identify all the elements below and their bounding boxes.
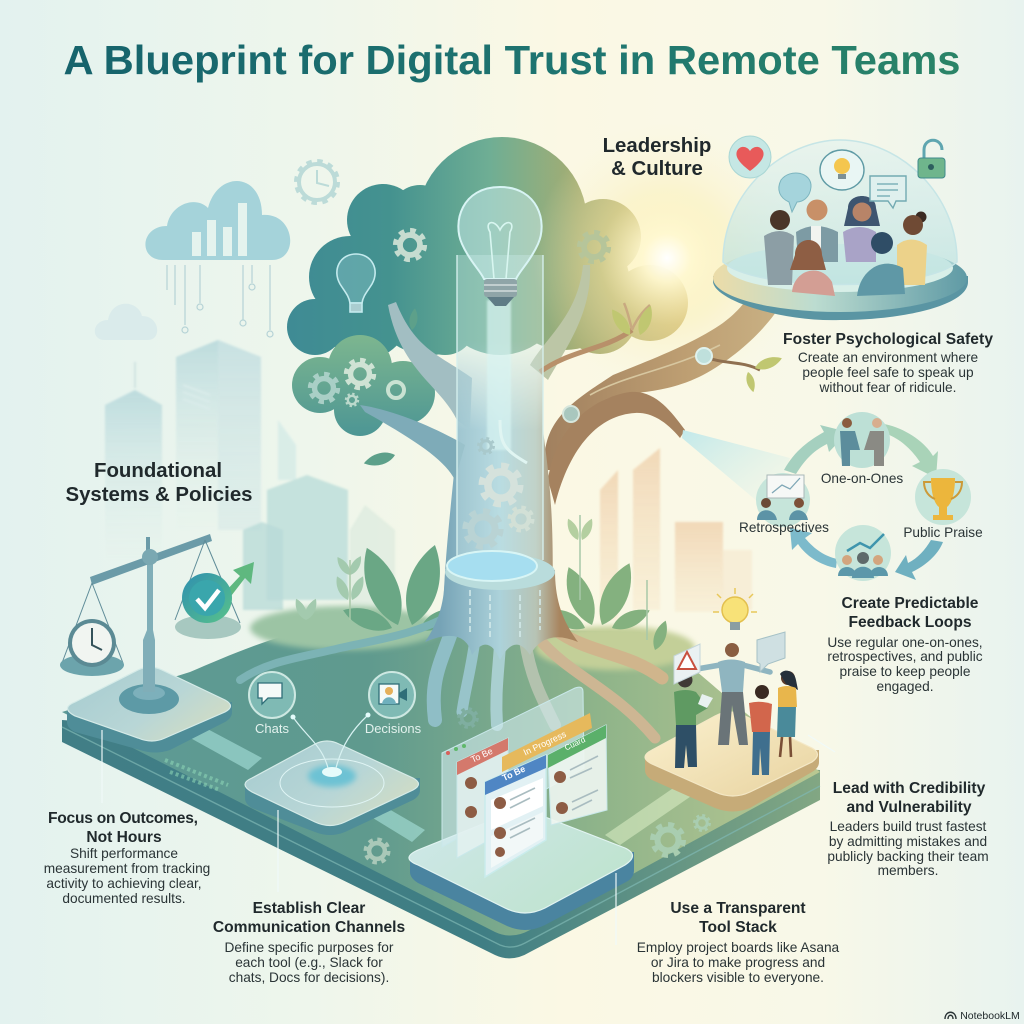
label: public praise: Public Praise xyxy=(903,525,983,540)
people in dome xyxy=(764,196,927,296)
labels: kanban columns: To Be xyxy=(501,764,527,783)
node: one-on-ones xyxy=(834,412,890,468)
heading: foundational systems: Systems & Policies xyxy=(65,484,253,506)
light beam to feedback cycle xyxy=(682,430,790,512)
label: one-on-ones: One-on-Ones xyxy=(821,471,903,486)
text: focus on outcomes: measurement from tracking xyxy=(44,861,210,876)
labels: kanban columns: In Progress xyxy=(522,729,568,758)
tree canopy xyxy=(287,137,688,359)
label: chats: Chats xyxy=(255,721,289,736)
text: transparent tool stack: blockers visible to everyone. xyxy=(652,970,824,985)
glass bridges between tiles xyxy=(165,725,700,845)
communication tile xyxy=(245,712,420,835)
text: transparent tool stack: Use a Transparent xyxy=(670,900,806,917)
text: credibility and vulnerability xyxy=(827,780,989,878)
text: predictable feedback loops: Use regular one-on-ones, xyxy=(827,635,983,650)
text: focus on outcomes xyxy=(44,810,210,906)
icon: chats xyxy=(249,672,295,736)
heading: leadership and culture xyxy=(603,135,711,180)
cycle arrows xyxy=(784,424,943,580)
text: predictable feedback loops: praise to keep people xyxy=(840,664,970,679)
heading: foundational systems: Foundational xyxy=(94,460,222,482)
text: transparent tool stack xyxy=(637,900,840,985)
trunk gears xyxy=(465,438,533,547)
text: focus on outcomes: documented results. xyxy=(62,891,186,906)
text: clear communication channels: each tool (e.g., Slack for xyxy=(235,955,383,970)
icon: decisions xyxy=(365,672,422,736)
text: predictable feedback loops: Create Predictable xyxy=(842,595,979,612)
people tile xyxy=(645,712,819,812)
tool stack tile xyxy=(409,812,634,930)
glowing trunk ring and drum xyxy=(425,551,578,660)
text: predictable feedback loops: retrospectives, and public xyxy=(827,649,983,664)
ground platform xyxy=(62,625,820,958)
icon: idea bulb with warning and chat xyxy=(674,588,785,684)
text: transparent tool stack: Employ project boards like Asana xyxy=(637,940,840,955)
text: foster psychological safety: Create an environment where xyxy=(798,350,978,365)
text: credibility and vulnerability: members. xyxy=(878,863,938,878)
cityscape: right xyxy=(600,448,752,620)
title: A Blueprint for Digital Trust in Remote Teams xyxy=(64,37,960,83)
light column with central bulb xyxy=(457,187,543,570)
ground gears xyxy=(365,709,710,863)
text: clear communication channels: Establish Clear xyxy=(253,900,365,917)
label: decisions: Decisions xyxy=(365,721,422,736)
labels: kanban columns: Cuard xyxy=(563,735,587,752)
connector lines xyxy=(102,730,835,945)
text: focus on outcomes: Shift performance xyxy=(70,846,178,861)
small bulb xyxy=(337,254,375,312)
text: predictable feedback loops xyxy=(827,595,983,694)
text: clear communication channels: Communication Channels xyxy=(213,919,405,936)
text: credibility and vulnerability: Leaders build trust fastest xyxy=(830,819,987,834)
icon: padlock xyxy=(918,140,945,178)
heading: leadership and culture: Leadership xyxy=(603,135,711,157)
labels: kanban columns xyxy=(469,729,587,783)
leaves xyxy=(362,304,784,469)
node: retrospectives xyxy=(756,473,810,527)
text: foster psychological safety: without fear of ridicule. xyxy=(819,380,956,395)
speech bubbles in dome xyxy=(779,150,906,212)
icon: heart xyxy=(729,136,771,178)
notebooklm mark: NotebookLM xyxy=(960,1010,1020,1022)
feedback cycle xyxy=(739,412,983,581)
text: foster psychological safety: Foster Psychological Safety xyxy=(783,331,993,348)
hill and plants xyxy=(250,515,695,670)
lower left canopy xyxy=(292,335,435,436)
canopy gears xyxy=(310,230,609,406)
text: credibility and vulnerability: publicly backing their team xyxy=(827,849,989,864)
icon: data cloud xyxy=(145,181,290,337)
text: predictable feedback loops: Feedback Loops xyxy=(848,614,972,631)
text: credibility and vulnerability: Lead with Credibility xyxy=(833,780,986,797)
text: clear communication channels: chats, Docs for decisions). xyxy=(229,970,389,985)
tree trunk and branches xyxy=(360,265,785,610)
text: clear communication channels: Define specific purposes for xyxy=(225,940,394,955)
text: transparent tool stack: or Jira to make progress and xyxy=(651,955,825,970)
glass dome platform xyxy=(713,140,968,320)
text: credibility and vulnerability: and Vulnerability xyxy=(846,799,972,816)
sunlight glow xyxy=(532,123,802,393)
heading: foundational systems xyxy=(65,460,253,506)
text: focus on outcomes: activity to achieving clear, xyxy=(46,876,202,891)
text: focus on outcomes: Not Hours xyxy=(86,829,162,846)
node: team growth xyxy=(835,525,891,581)
node: public praise xyxy=(915,469,971,525)
text: foster psychological safety xyxy=(783,331,993,395)
people: leader with team xyxy=(674,643,798,775)
label: retrospectives: Retrospectives xyxy=(739,520,829,535)
labels: kanban columns: To Be xyxy=(469,746,494,765)
text: focus on outcomes: Focus on Outcomes, xyxy=(48,810,198,827)
heading: leadership and culture: & Culture xyxy=(611,158,703,180)
roots xyxy=(240,615,662,738)
balance scale xyxy=(60,534,254,714)
kanban board xyxy=(442,687,607,877)
text: clear communication channels xyxy=(213,900,405,985)
scale platform tile xyxy=(67,667,232,752)
text: credibility and vulnerability: by admitting mistakes and xyxy=(829,834,987,849)
icon: small cloud xyxy=(95,304,157,340)
text: predictable feedback loops: engaged. xyxy=(876,679,934,694)
cityscape: left xyxy=(105,340,395,610)
text: foster psychological safety: people feel safe to speak up xyxy=(802,365,974,380)
text: transparent tool stack: Tool Stack xyxy=(699,919,777,936)
icon: clock gear xyxy=(296,161,338,203)
